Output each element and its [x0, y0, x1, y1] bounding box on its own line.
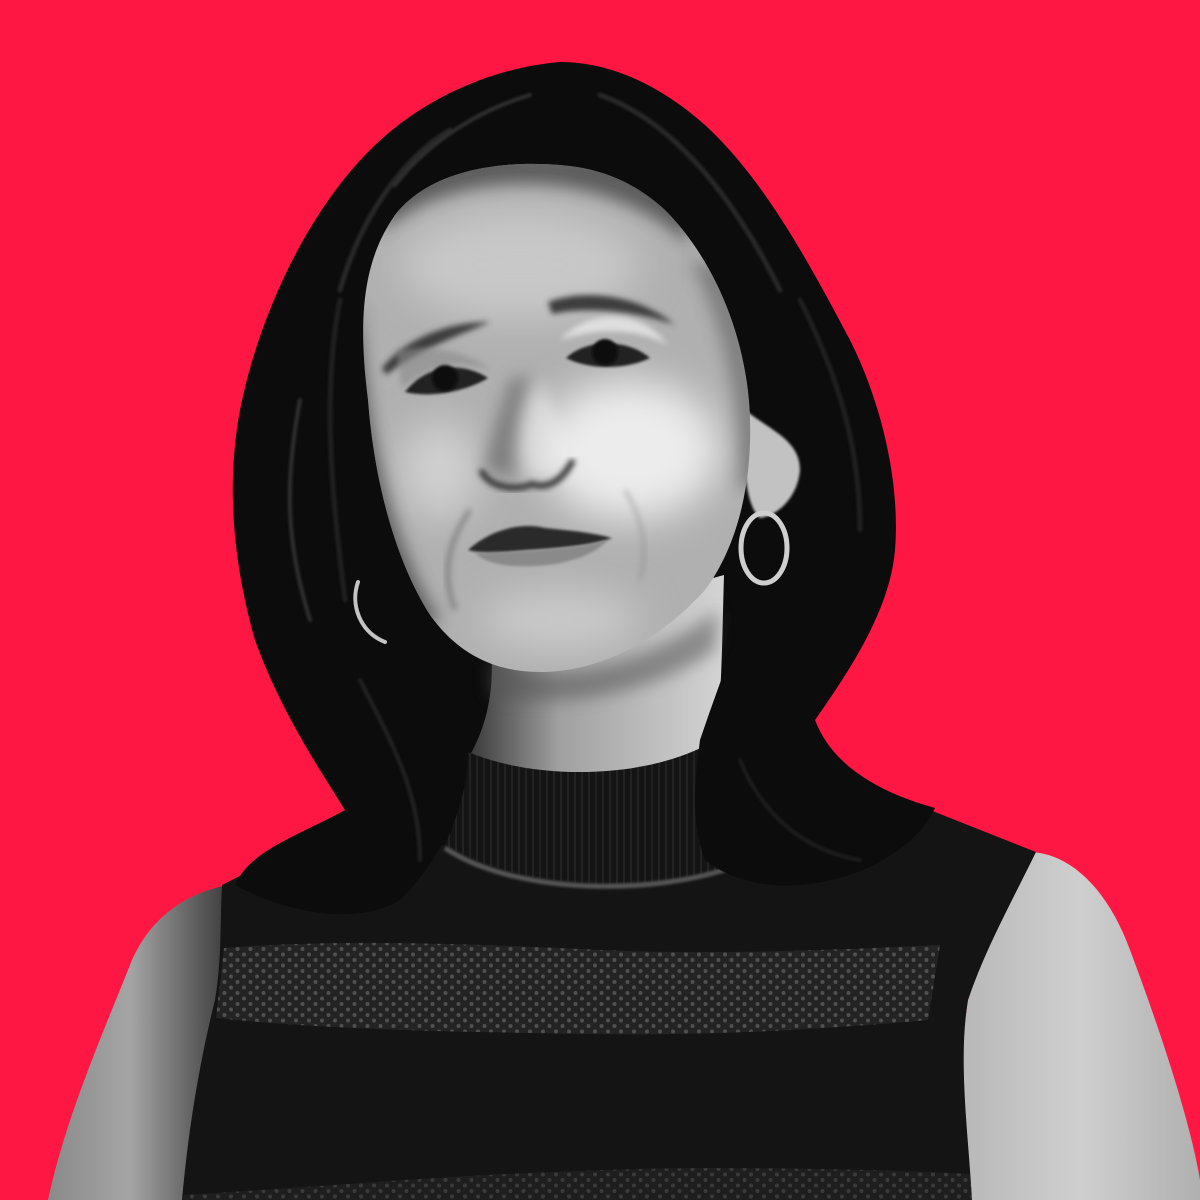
hair highlights	[290, 95, 860, 860]
chin light	[480, 590, 640, 650]
hair solid silhouette	[233, 62, 896, 845]
left eye	[396, 348, 492, 394]
right eyebrow	[548, 295, 675, 325]
turtleneck collar	[445, 742, 745, 886]
hair lower left lobe	[235, 610, 465, 914]
right arm	[962, 852, 1200, 1200]
left cheek	[400, 420, 480, 520]
nose side shadow	[484, 375, 530, 480]
top shade from hair	[383, 164, 693, 247]
sleeveless black top	[182, 810, 1036, 1200]
right earring	[741, 513, 787, 583]
left face shade	[364, 310, 445, 628]
left earring	[355, 582, 385, 642]
neck	[470, 575, 724, 773]
face	[363, 164, 750, 672]
lower hem band	[182, 1168, 972, 1200]
mesh band on top	[216, 943, 940, 1034]
nasolabial fold	[448, 510, 470, 610]
right eye	[560, 317, 668, 367]
forehead light	[400, 210, 640, 320]
left eyebrow	[382, 322, 490, 375]
nose	[482, 380, 578, 488]
right edge shade	[688, 255, 750, 494]
neck shadow under chin	[490, 610, 718, 701]
mouth	[468, 526, 612, 566]
left arm	[48, 885, 230, 1200]
right cheek light	[540, 380, 720, 520]
hair lower right lobe	[695, 560, 935, 886]
ear	[744, 410, 800, 518]
